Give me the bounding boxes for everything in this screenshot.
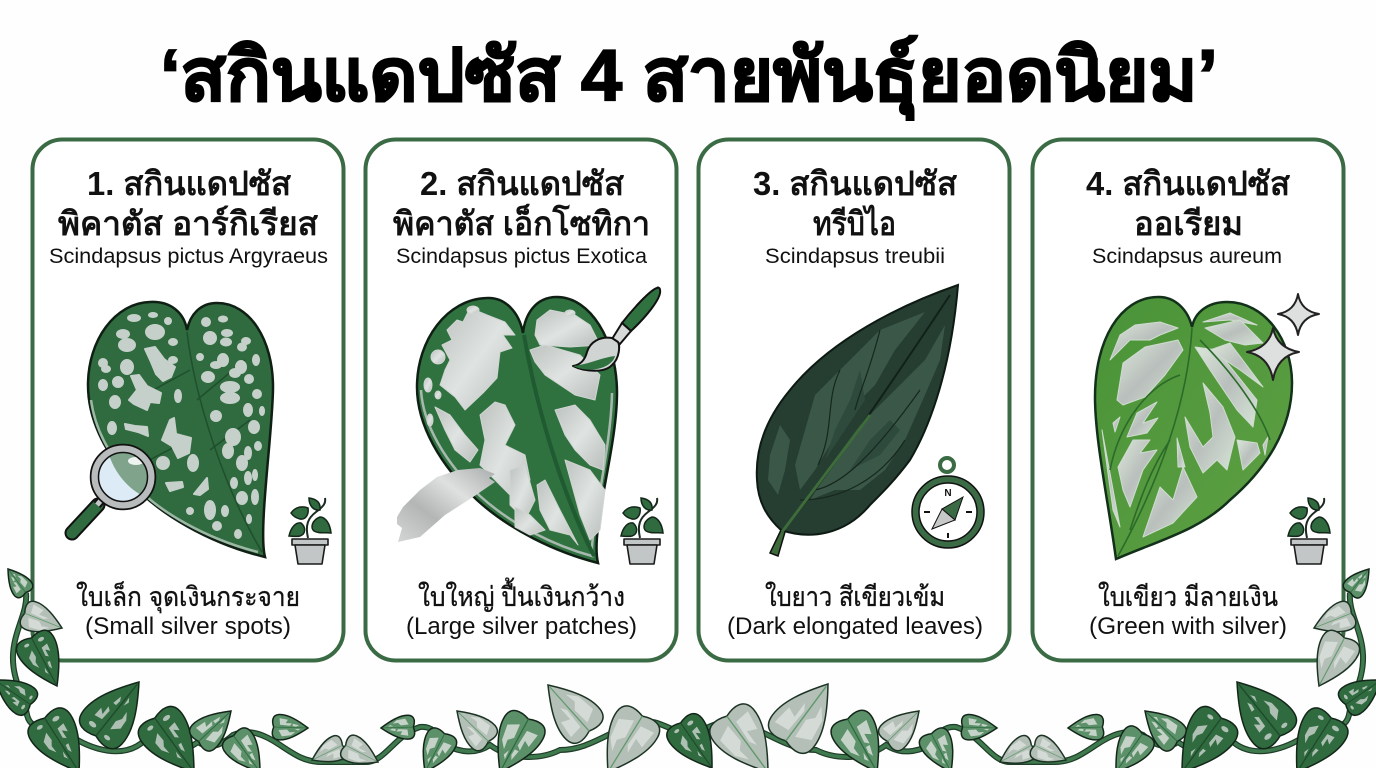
heading line 2: card 1: พิคาตัส อาร์กิเรียส — [58, 205, 319, 242]
title: ‘สกินแดปซัส 4 สายพันธุ์ยอดนิยม’ — [160, 35, 1218, 121]
panel: card 2 — [366, 140, 676, 660]
icon: compass: N — [944, 488, 952, 499]
icon: potted plant card 1 — [289, 498, 331, 564]
vine leaves right — [705, 562, 1376, 768]
heading: card 4: 4. สกินแดปซัส — [1086, 165, 1291, 202]
scientific name: card 2: Scindapsus pictus Exotica — [396, 245, 647, 268]
icon: paint brush — [573, 288, 660, 371]
scientific name: card 3: Scindapsus treubii — [765, 245, 945, 268]
description: card 3: ใบยาว สีเขียวเข้ม — [765, 581, 945, 612]
vine border — [0, 562, 1376, 768]
vine stem right — [688, 593, 1363, 762]
heading: card 3: 3. สกินแดปซัส — [753, 165, 958, 202]
heading line 2: card 3: ทรีบิไอ — [813, 204, 896, 242]
heading: card 1: 1. สกินแดปซัส — [87, 165, 292, 202]
leaf: green with silver — [1095, 297, 1292, 559]
leaf: small silver spots — [88, 302, 273, 557]
icon: small sparkle — [1278, 294, 1319, 335]
heading line 2: card 4: ออเรียม — [1134, 205, 1243, 242]
icon: potted plant card 4 — [1288, 498, 1330, 564]
leaf: large silver patches — [417, 297, 617, 563]
english description: card 3: (Dark elongated leaves) — [727, 613, 983, 640]
vine stem left — [13, 593, 688, 762]
scientific name: card 4: Scindapsus aureum — [1092, 245, 1282, 268]
leaf: dark elongated — [757, 285, 958, 556]
english description: card 1: (Small silver spots) — [85, 613, 291, 640]
icon: magnifying glass — [72, 445, 155, 533]
panel: card 3 — [698, 140, 1010, 660]
english description: card 4: (Green with silver) — [1089, 613, 1287, 640]
heading: card 2: 2. สกินแดปซัส — [420, 165, 625, 202]
scientific name: card 1: Scindapsus pictus Argyraeus — [49, 245, 328, 268]
description: card 2: ใบใหญ่ ปื้นเงินกว้าง — [418, 577, 625, 612]
description: card 4: ใบเขียว มีลายเงิน — [1098, 581, 1278, 612]
heading line 2: card 2: พิคาตัส เอ็กโซทิกา — [393, 203, 650, 242]
icon: compass — [912, 458, 984, 548]
paint swipe — [397, 468, 495, 542]
english description: card 2: (Large silver patches) — [406, 613, 637, 640]
panel: card 1 — [32, 140, 344, 660]
panel: card 4 — [1032, 140, 1344, 660]
icon: large sparkle — [1247, 328, 1299, 380]
description: card 1: ใบเล็ก จุดเงินกระจาย — [76, 579, 300, 614]
icon: potted plant card 2 — [621, 498, 663, 564]
vine leaves left — [0, 562, 729, 768]
